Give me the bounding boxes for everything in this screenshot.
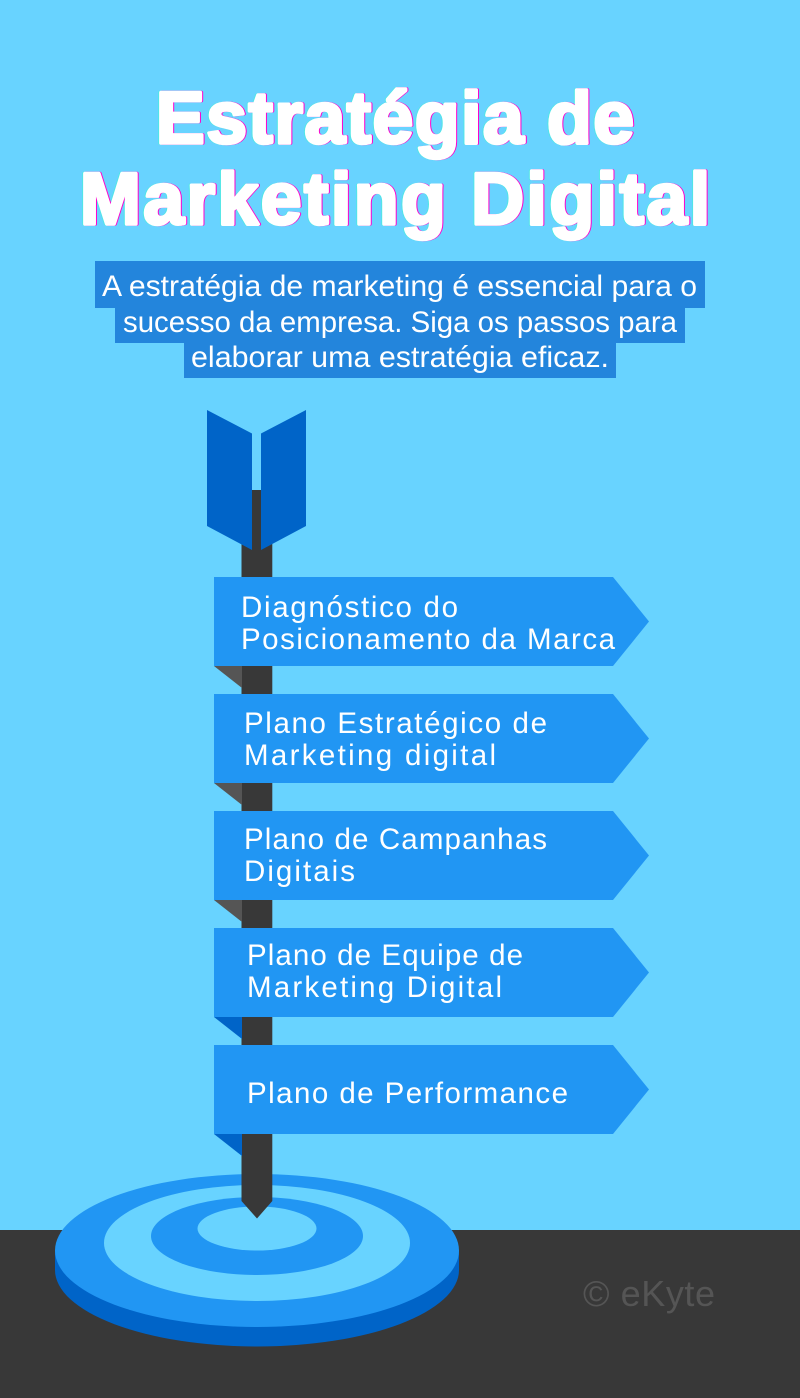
- intro text block with highlight: sucesso da empresa. Siga os passos para: [123, 306, 677, 339]
- step 4 banner: [214, 928, 649, 1039]
- step 1 banner: Diagnóstico do: [241, 591, 458, 624]
- step 2 banner: Marketing digital: [244, 739, 496, 772]
- title: [80, 78, 710, 240]
- step 5 banner: [214, 1045, 649, 1156]
- intro text block with highlight: [95, 261, 705, 378]
- step 3 banner: [214, 811, 649, 922]
- step 5 banner: Plano de Performance: [247, 1077, 568, 1110]
- copyright mark: © eKyte: [583, 1273, 715, 1314]
- step 2 banner: Plano Estratégico de: [244, 707, 547, 740]
- arrow fletching: [207, 410, 306, 550]
- title: Estratégia de: [156, 78, 634, 159]
- intro text block with highlight: A estratégia de marketing é essencial para o: [102, 270, 697, 303]
- step 1 banner: Posicionamento da Marca: [241, 623, 616, 656]
- step 1 banner: [214, 577, 649, 688]
- title: Marketing Digital: [80, 159, 710, 240]
- step 4 banner: Plano de Equipe de: [247, 939, 523, 972]
- intro text block with highlight: elaborar uma estratégia eficaz.: [191, 341, 609, 374]
- target base: [55, 1174, 459, 1346]
- step 4 banner: Marketing Digital: [247, 971, 502, 1004]
- step 3 banner: Plano de Campanhas: [244, 823, 547, 856]
- step 2 banner: [214, 694, 649, 805]
- arrow shaft and tip: [242, 490, 272, 1218]
- dark floor band: [0, 1230, 800, 1398]
- step 3 banner: Digitais: [244, 855, 355, 888]
